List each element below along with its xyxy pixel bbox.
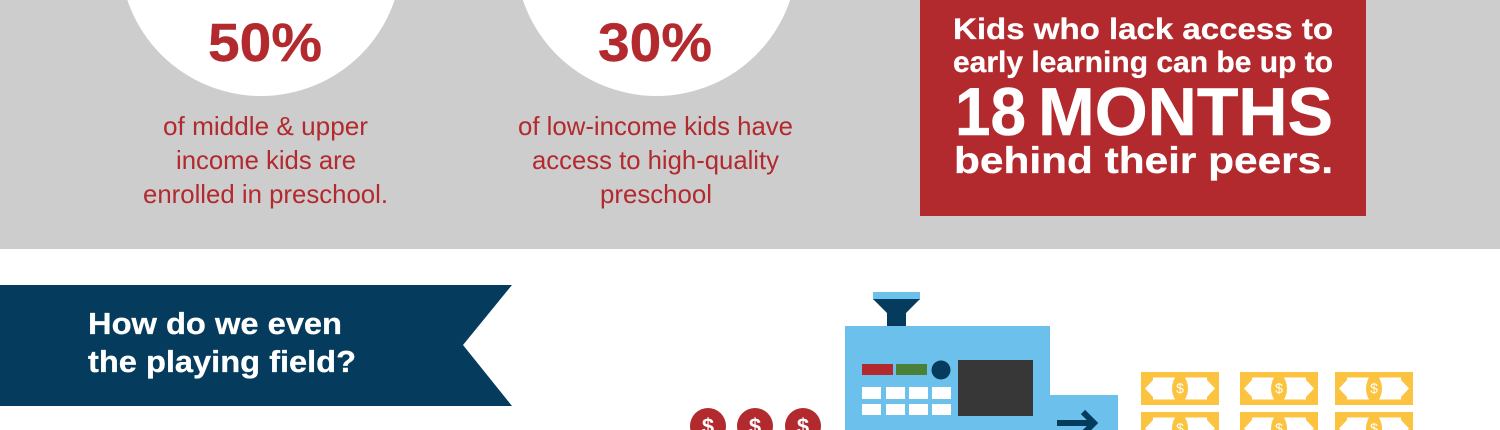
stat: 30 percent: access to high-quality <box>532 145 779 175</box>
icon: money machine <box>845 292 1118 430</box>
stat: 50 percent <box>120 0 402 209</box>
stat: 50 percent: income kids are <box>176 145 356 175</box>
banner: how do we even the playing field <box>0 285 512 406</box>
callout: 18 months behind: 18 <box>955 74 1026 150</box>
callout: 18 months behind <box>920 0 1366 216</box>
icon: dollar bills: $ <box>1176 380 1184 396</box>
icon: dollar bills <box>1141 372 1413 430</box>
callout: 18 months behind: MONTHS <box>1038 74 1333 150</box>
callout: 18 months behind: Kids who lack access to <box>953 13 1333 46</box>
icon: dollar bills: $ <box>1370 380 1378 396</box>
panel: access statistics <box>0 0 1500 249</box>
stat: 30 percent: 30% <box>598 13 712 73</box>
banner: how do we even the playing field: the playing field? <box>88 344 356 379</box>
icon: dollar bills: $ <box>1275 380 1283 396</box>
stat: 50 percent: 50% <box>208 13 322 73</box>
banner: how do we even the playing field: How do we even <box>88 306 342 341</box>
icon: coins <box>690 408 821 430</box>
stat: 30 percent: of low-income kids have <box>518 111 793 141</box>
stat: 30 percent <box>516 0 798 209</box>
callout: 18 months behind: behind their peers. <box>954 140 1333 181</box>
stat: 50 percent: of middle & upper <box>163 111 368 141</box>
stat: 50 percent: enrolled in preschool. <box>143 179 388 209</box>
stat: 30 percent: preschool <box>600 179 712 209</box>
callout: 18 months behind: early learning can be up to <box>953 46 1333 79</box>
